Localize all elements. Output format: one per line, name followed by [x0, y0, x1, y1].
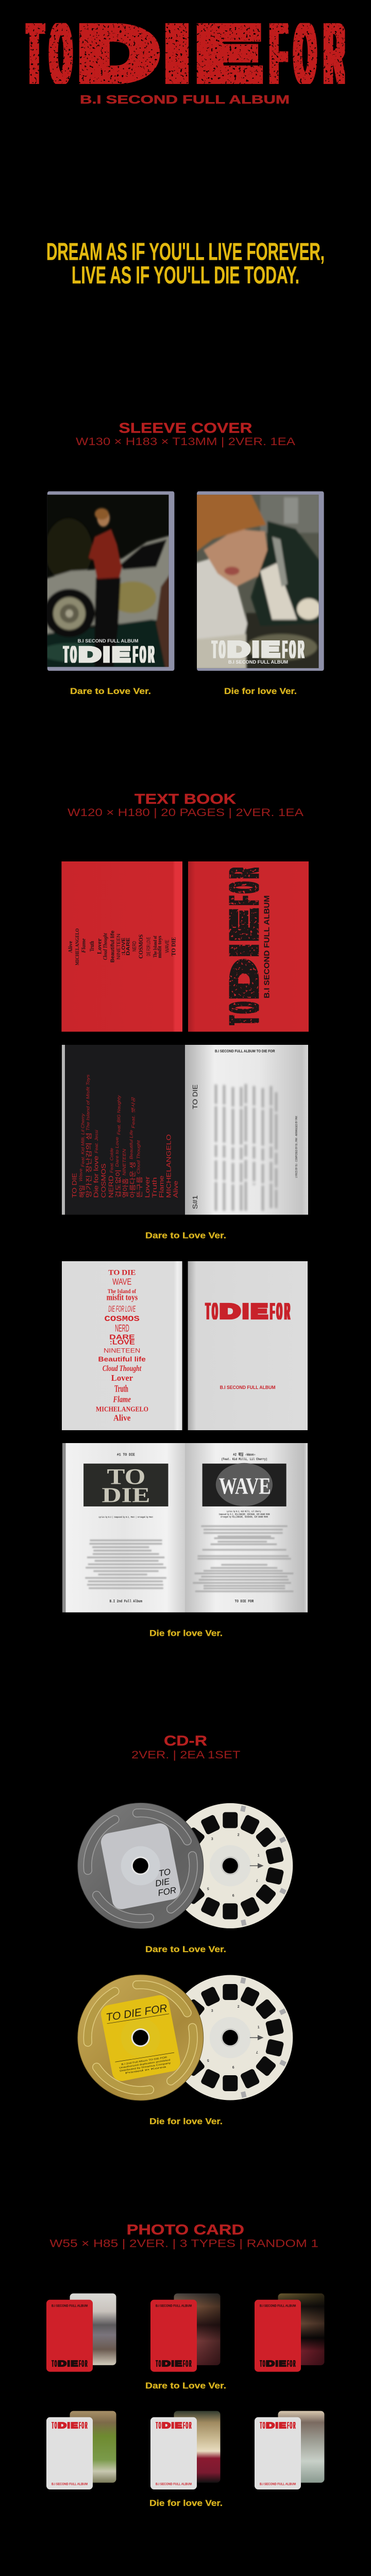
rotated track list: Dare to Love — [114, 1137, 120, 1167]
heading: text book: W120 × H180 | 20 PAGES | 2VER. 1EA — [68, 807, 303, 819]
white reel disc: 1 — [258, 2026, 260, 2029]
red back cover with rotated track list: NERD — [132, 941, 138, 952]
song title image: TO DIE: TO — [107, 1465, 145, 1489]
rotated track list: 열아홉 — [122, 1178, 129, 1198]
sleeve photo: Die for love version — [195, 492, 324, 671]
rotated track list: NERD — [107, 1175, 114, 1198]
white reel disc — [167, 1975, 293, 2100]
grey back cover with track list: NINETEEN — [104, 1347, 140, 1354]
disc handwriting: DIE — [155, 1876, 171, 1889]
blurred lyrics — [216, 1084, 276, 1211]
spread: lyric pages with song title images: Composed by B.I, MILLIONAIRE, HIHIHANS, KIM GRAND MOON — [219, 1513, 270, 1516]
red back cover with rotated track list: Lover — [96, 938, 103, 954]
spread: lyric pages with song title images: B.I 2nd Full Album — [110, 1600, 142, 1604]
grey back cover with track list: Flame — [113, 1394, 131, 1404]
rotated track list: 아름다운 생 — [129, 1162, 137, 1198]
title logo: TO DIE FOR: E — [197, 13, 260, 95]
sleeve logo: F — [282, 636, 287, 664]
tagline — [46, 238, 325, 289]
spread: lyric pages with song title images: Lyrics by B.I, Kid Milli, Lil Cherry — [227, 1511, 261, 1513]
sleeve logo: D — [228, 637, 250, 662]
grey back cover with track list — [62, 1261, 182, 1430]
spread: lyric pages with song title images: #2 해일 ‹Wave› — [233, 1452, 256, 1458]
card 1 — [46, 2294, 116, 2372]
card 2: E — [175, 2360, 182, 2368]
grey back cover with track list: TO DIE — [108, 1268, 136, 1277]
panel: photo card — [46, 2222, 325, 2508]
card 1: I — [68, 2360, 70, 2368]
heading: sleeve cover — [76, 420, 295, 448]
rotated track list: Feat. Colde — [109, 1148, 114, 1173]
white reel disc — [167, 1803, 293, 1928]
white reel disc: 7 — [256, 1878, 258, 1882]
photo cards: Die for love version — [46, 2411, 325, 2489]
red back cover with rotated track list: The Island of — [153, 936, 158, 958]
rotated track list: Feat. 뱃사공 — [131, 1096, 136, 1128]
red back cover with rotated track list: MICHELANGELO — [75, 928, 80, 965]
card 4: B.I SECOND FULL ALBUM — [52, 2482, 88, 2486]
lyric page text: B.I SECOND FULL ALBUM TO DIE FOR — [215, 1049, 275, 1053]
heading: photo card: PHOTO CARD — [127, 2222, 244, 2238]
grey film can disc — [78, 1803, 204, 1928]
card 5: O — [159, 2420, 161, 2431]
grey back cover with track list: MICHELANGELO — [96, 1405, 148, 1413]
sleeve logo: E — [112, 643, 130, 666]
heading: text book — [68, 791, 303, 819]
spread: lyric pages with song title images: TO DIE FOR — [235, 1600, 254, 1604]
card 6 — [255, 2411, 325, 2489]
grey back cover with track list: Cloud Thought — [103, 1365, 142, 1373]
song title image: WAVE — [203, 1463, 286, 1506]
rotated track list: Lover — [144, 1176, 151, 1198]
rotated track list: Truth — [151, 1177, 158, 1198]
card 6: O — [263, 2420, 265, 2431]
rotated track list: Feat. BIG Naughty — [116, 1095, 121, 1135]
grey back cover with track list: The Island of — [108, 1289, 136, 1295]
white reel disc: 6 — [232, 2066, 234, 2070]
red back cover with rotated track list: Alive — [68, 941, 74, 953]
sleeve logo — [211, 636, 305, 664]
photo cards: Dare to Love version — [46, 2294, 325, 2372]
disc pair: Die for love version — [78, 1975, 293, 2100]
disc label text: Distributed by Dreamus Company — [120, 2061, 172, 2072]
card 4: E — [71, 2421, 78, 2430]
sleeve logo: O — [71, 641, 76, 668]
disc label text: Unauthorized duplication prohibited — [119, 2058, 171, 2069]
red front cover with rotated logo: E — [224, 910, 264, 941]
card 2 — [150, 2294, 221, 2372]
heading: sleeve cover: SLEEVE COVER — [119, 420, 252, 436]
grey front cover with logo: T — [206, 1298, 210, 1325]
red front cover with rotated logo: I — [224, 945, 264, 956]
label: Dare to Love Ver. — [145, 2381, 226, 2391]
red back cover with rotated track list — [61, 861, 182, 1031]
white reel disc: 1 — [258, 1854, 260, 1857]
white reel disc: 5 — [207, 2058, 209, 2062]
card 2: F — [183, 2358, 185, 2369]
grey back cover with track list: Lover — [111, 1374, 133, 1383]
sleeve logo: I — [252, 637, 259, 662]
rotated track list: MICHELANGELO — [165, 1134, 173, 1198]
sleeve logo: T — [212, 636, 217, 664]
red back cover with rotated track list: WAVE — [164, 940, 170, 953]
card 4: F — [79, 2420, 81, 2431]
card 3: F — [287, 2358, 289, 2369]
song title image: TO DIE: DIE — [102, 1484, 150, 1507]
card 4: D — [58, 2421, 66, 2430]
rotated track list: The Island of Misfit Toys — [85, 1075, 90, 1131]
card 2: B.I SECOND FULL ALBUM — [156, 2304, 192, 2308]
sleeve photo: Die for love version: B.I SECOND FULL ALBUM — [228, 659, 288, 665]
red back cover with rotated track list: :LOVE — [121, 937, 126, 956]
card 5: F — [183, 2420, 185, 2431]
heading: CD-R — [131, 1733, 241, 1761]
grey back cover with track list: misfit toys — [107, 1293, 138, 1302]
heading: CD-R: CD-R — [164, 1733, 207, 1749]
card 1: F — [79, 2358, 81, 2369]
card 3: D — [266, 2360, 275, 2368]
disc handwriting — [153, 1867, 177, 1898]
sleeve photo: Dare to Love version — [40, 492, 174, 671]
heading: sleeve cover: W130 × H183 × T13MM | 2VER. 1EA — [76, 436, 295, 448]
heading: text book: TEXT BOOK — [134, 791, 236, 807]
heading: photo card — [49, 2222, 318, 2250]
title logo: TO DIE FOR: I — [166, 13, 189, 95]
spread: lyric pages with song title images: (Feat. Kid Milli, Lil Cherry) — [221, 1458, 267, 1461]
sleeve logo — [63, 641, 155, 668]
card 4: I — [68, 2421, 70, 2430]
rotated track list: Feat. Kid Milli, Lil Cherry — [80, 1113, 85, 1167]
sleeve logo: E — [261, 637, 279, 662]
panel: sleeve cover — [40, 420, 324, 696]
song title image: TO DIE — [83, 1464, 168, 1507]
grey front cover with logo: I — [243, 1300, 248, 1323]
rotated track list: Die for love — [93, 1156, 100, 1198]
grey back cover with track list: Alive — [113, 1414, 131, 1423]
sleeve logo: O — [219, 636, 225, 664]
white reel disc: 7 — [256, 2050, 258, 2054]
card 2: I — [172, 2360, 174, 2368]
rotated track list: Alive — [172, 1180, 179, 1198]
version labels: Dare to Love Ver. — [70, 687, 151, 696]
card 3: O — [263, 2358, 265, 2369]
white reel disc: 3 — [211, 1837, 213, 1841]
spread: lyric pages with song title images: Lyrics by B.I | Composed by B.I, Pent | Arranged by Pent — [98, 1516, 153, 1519]
gold film can disc — [78, 1975, 204, 2100]
rotated track list: Beautiful Life — [128, 1130, 133, 1159]
grey front cover with logo — [188, 1261, 308, 1430]
grey back cover with track list: NERD — [115, 1323, 129, 1334]
rotated track list: TO DIE — [71, 1173, 78, 1198]
card 3: I — [276, 2360, 278, 2368]
grey front cover with logo: F — [270, 1298, 275, 1325]
sleeve logo: F — [133, 641, 138, 668]
white reel disc: 5 — [207, 1886, 209, 1890]
heading: photo card: W55 × H85 | 2VER. | 3 TYPES | RANDOM 1 — [49, 2238, 318, 2250]
spread: lyric pages with song title images: Arranged by MILLIONAIRE, HIHIHANS, KIM GRAND MOON — [221, 1516, 268, 1519]
grey back cover with track list: DIE FOR LOVE — [108, 1304, 136, 1314]
grey back cover with track list: WAVE — [112, 1277, 131, 1287]
red back cover with rotated track list: Beautiful life — [110, 930, 115, 962]
red front cover with rotated logo — [188, 861, 309, 1031]
title logo: TO DIE FOR: T — [26, 5, 43, 102]
card 4: T — [52, 2420, 54, 2431]
grey front cover with logo: D — [220, 1300, 240, 1323]
card 4: O — [55, 2420, 57, 2431]
card 1: T — [52, 2358, 54, 2369]
disc label text: TO DIE FOR — [105, 2002, 168, 2024]
rotated track list: NINETEEN — [122, 1148, 127, 1176]
red front cover with rotated logo: T — [220, 1016, 268, 1025]
card 1: B.I SECOND FULL ALBUM — [52, 2304, 88, 2308]
grey front cover with logo: E — [251, 1300, 267, 1323]
sleeve photo: Dare to Love version: B.I SECOND FULL ALBUM — [78, 638, 139, 643]
grey front cover with logo: O — [212, 1298, 217, 1325]
card 1: O — [55, 2358, 57, 2369]
disc handwriting: TO — [158, 1867, 172, 1878]
label: Dare to Love Ver. — [145, 1945, 226, 1954]
red back cover with rotated track list: DARE — [126, 937, 131, 956]
card 4 — [46, 2411, 116, 2489]
red back cover with rotated track list: Truth — [89, 941, 95, 952]
label: Die for love Ver. — [149, 2117, 223, 2126]
card 2: O — [159, 2358, 161, 2369]
red front cover with rotated logo: F — [220, 896, 268, 905]
grey back cover with track list: Truth — [114, 1383, 128, 1394]
card 6: T — [260, 2420, 262, 2431]
card 1: E — [71, 2360, 78, 2368]
card 6: E — [279, 2421, 286, 2430]
red back cover with rotated track list: COSMOS — [138, 935, 144, 959]
rotated track list: COSMOS — [100, 1163, 107, 1198]
red back cover with rotated track list: misfit toys — [157, 936, 163, 958]
disc label text: B.I 2nd Full Album TO DIE FOR — [121, 2056, 168, 2065]
label: Die for love Ver. — [149, 1629, 223, 1638]
red front cover with rotated logo: B.I SECOND FULL ALBUM — [263, 895, 271, 998]
card 3 — [255, 2294, 325, 2372]
disc label text — [105, 2002, 177, 2076]
sleeve logo: T — [63, 641, 69, 668]
card 5: D — [162, 2421, 171, 2430]
card 6: I — [276, 2421, 278, 2430]
card 6: B.I SECOND FULL ALBUM — [260, 2482, 296, 2486]
card 5: B.I SECOND FULL ALBUM — [156, 2482, 192, 2486]
white reel disc: 6 — [232, 1894, 234, 1897]
grey back cover with track list: Beautiful life — [98, 1355, 146, 1363]
lyric page text: S#1 — [191, 1195, 199, 1209]
title logo: TO DIE FOR — [26, 5, 345, 102]
panel: text book — [61, 791, 309, 1638]
red back cover with rotated track list: NINETEEN — [116, 934, 122, 959]
blurred lyrics — [85, 1526, 293, 1591]
card 5: E — [175, 2421, 182, 2430]
red front cover with rotated logo: D — [224, 960, 264, 998]
rotated track list: 망가진 장난감의 섬 — [86, 1132, 93, 1198]
disc label text: Printed in Korea — [125, 2065, 167, 2074]
card 2: D — [162, 2360, 171, 2368]
rotated track list: 뜬구름 — [136, 1176, 143, 1198]
rotated track list: 해일 — [78, 1185, 86, 1198]
card 1: D — [58, 2360, 66, 2368]
card 2: T — [156, 2358, 158, 2369]
red back cover with rotated track list: Flame — [81, 938, 87, 953]
title logo: TO DIE FOR: O — [50, 5, 71, 102]
card 3: E — [279, 2360, 286, 2368]
grey back cover with track list: :LOVE — [110, 1338, 135, 1346]
red back cover with rotated track list: Cloud Thought — [103, 933, 108, 960]
subtitle: B.I second full album: B.I SECOND FULL ALBUM — [80, 93, 290, 106]
red back cover with rotated track list: DIE FOR LOVE — [146, 937, 151, 956]
spread: lyric pages with song title images: #1 TO DIE — [117, 1453, 135, 1458]
red front cover with rotated logo: O — [220, 1003, 268, 1013]
card 6: D — [266, 2421, 275, 2430]
label: Dare to Love Ver. — [145, 1231, 226, 1241]
disc pair: Dare to Love version — [78, 1803, 293, 1928]
white reel disc: 2 — [238, 1833, 240, 1837]
label: Die for love Ver. — [149, 2499, 223, 2508]
rotated track list: 겁도없이 — [114, 1170, 122, 1198]
heading: CD-R: 2VER. | 2EA 1SET — [131, 1749, 241, 1761]
title logo: TO DIE FOR: F — [270, 5, 287, 102]
grey back cover with track list: COSMOS — [105, 1315, 140, 1324]
lyric page text: LYRICS BY B.I · COMPOSED BY B.I, PAX · ARRANGED BY PAX — [295, 1115, 298, 1178]
rotated track list: Cloud Thought — [136, 1140, 141, 1174]
version labels — [70, 687, 297, 696]
card 5 — [150, 2411, 221, 2489]
rotated track list: Wave — [78, 1168, 83, 1181]
card 3: T — [260, 2358, 262, 2369]
sleeve logo: I — [103, 643, 110, 666]
card 3: B.I SECOND FULL ALBUM — [260, 2304, 296, 2308]
rotated track list: Feat. Jessi — [94, 1129, 99, 1153]
white reel disc: 2 — [238, 2005, 240, 2009]
lyric page text — [191, 1049, 298, 1209]
spread: dark track list page and lyric page — [62, 1045, 308, 1215]
sleeve logo: D — [79, 643, 101, 666]
title logo: TO DIE FOR: D — [79, 13, 157, 95]
white reel disc: 3 — [211, 2009, 213, 2013]
red back cover with rotated track list: TO DIE — [171, 937, 177, 956]
grey back cover with track list: DARE — [109, 1333, 135, 1341]
disc handwriting: FOR — [157, 1885, 177, 1898]
song title image: WAVE: WAVE — [219, 1473, 271, 1499]
spread: lyric pages with song title images — [62, 1443, 308, 1613]
card 6: F — [287, 2420, 289, 2431]
lyric page text: TO DIE — [191, 1084, 199, 1109]
rotated track list — [71, 1075, 179, 1198]
grey front cover with logo: B.I SECOND FULL ALBUM — [220, 1385, 276, 1390]
panel: CD-R — [78, 1733, 293, 2126]
rotated track list: Flame — [158, 1175, 165, 1198]
card 5: T — [156, 2420, 158, 2431]
card 5: I — [172, 2421, 174, 2430]
version labels: Die for love Ver. — [224, 687, 297, 696]
